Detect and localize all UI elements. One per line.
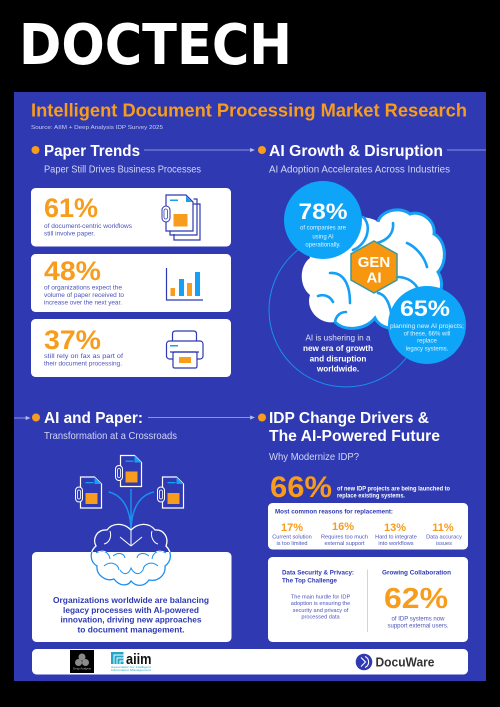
panel: reasons for replacement: 11%: [432, 522, 454, 534]
callout: 65% circle: legacy systems.: [406, 346, 449, 352]
callout: 78% circle: 78%: [298, 199, 348, 224]
panel: reasons for replacement: Most common reasons for replacement:: [275, 508, 393, 516]
panel: sponsor logos: [32, 649, 468, 674]
logo: DocuWare: DocuWare: [376, 655, 435, 669]
panel: reasons for replacement: Requires too much: [321, 534, 368, 540]
text block: new era of growth: worldwide.: [316, 364, 359, 374]
panel: security and collaboration: support external users.: [387, 624, 449, 630]
callout: 65% circle: replace: [417, 338, 437, 344]
main blue panel: [14, 92, 486, 681]
heading: Paper Trends: [32, 143, 201, 176]
heading: IDP Change Drivers: The AI-Powered Future: [269, 428, 440, 445]
panel: reasons for replacement: [268, 503, 468, 550]
panel: reasons for replacement: 13%: [384, 522, 406, 534]
panel: reasons for replacement: into workflows: [378, 541, 414, 547]
logo: Deep Analysis: Deep Analysis: [73, 666, 91, 670]
panel: balancing text card: innovation, driving new approaches: [60, 616, 202, 624]
panel: reasons for replacement: external support: [324, 541, 365, 547]
heading: Paper Trends: Paper Still Drives Business Processes: [44, 164, 201, 176]
panel: reasons for replacement: Current solution: [272, 534, 312, 540]
source line: Source: AIIM + Deep Analysis IDP Survey 2025: [31, 125, 163, 131]
big orbit ring: [269, 233, 423, 387]
heading: IDP Change Drivers: IDP Change Drivers &: [269, 410, 429, 427]
text block: new era of growth: AI is ushering in a: [305, 334, 371, 342]
panel: 48% stat card: volume of paper received to: [44, 292, 124, 299]
panel: security and collaboration: The main hurdle for IDP: [291, 594, 350, 600]
icon: Gen AI hexagon: GEN: [358, 254, 390, 271]
panel: reasons for replacement: issues: [436, 541, 452, 547]
panel: security and collaboration: 62%: [384, 583, 448, 615]
logo: AIIM: [111, 651, 152, 672]
heading: IDP Change Drivers: Why Modernize IDP?: [269, 451, 359, 463]
heading: AI and Paper: Transformation at a Crossroads: [44, 430, 177, 442]
panel: security and collaboration: Growing Collaboration: [382, 570, 451, 576]
heading: AI Growth and Disruption: AI Adoption Accelerates Across Industries: [269, 164, 450, 176]
icon: paper stack: [162, 195, 200, 240]
heading: Paper Trends: Paper Trends: [44, 143, 140, 160]
panel: balancing text card: to document management.: [78, 626, 184, 634]
logo: DocuWare: [356, 654, 435, 670]
heading: AI Growth and Disruption: [258, 143, 486, 176]
panel: security and collaboration: [268, 557, 468, 642]
heading: AI and Paper: [32, 410, 177, 442]
panel: 48% stat card: 48%: [44, 256, 101, 286]
panel: 61% stat card: 61%: [44, 193, 98, 223]
icon: brain outline: [91, 524, 170, 585]
panel: 37% stat card: still rely on fax as part of: [44, 353, 123, 360]
panel: security and collaboration: Data Security & Privacy:: [282, 570, 354, 576]
panel: 48% stat card: of organizations expect the: [44, 284, 122, 292]
panel: reasons for replacement: Data accuracy: [426, 534, 462, 540]
panel: reasons for replacement: is too limited: [276, 541, 308, 547]
panel: 48% stat card: increase over the next year.: [44, 300, 122, 306]
panel: balancing text card: [32, 552, 232, 642]
heading: IDP Change Drivers: [258, 410, 440, 463]
callout: 78% circle: of companies are: [300, 226, 347, 232]
logo: AIIM: Association for Intelligent: [111, 665, 151, 669]
panel: reasons for replacement: Hard to integrate: [375, 534, 417, 540]
arrows: documents into brain: [108, 489, 154, 532]
logo: Deep Analysis: [70, 650, 94, 673]
callout: 65% circle: planning new AI projects;: [390, 324, 464, 330]
stat: 66%: replace existing systems.: [337, 492, 405, 500]
text block: new era of growth: [303, 334, 373, 374]
callout: 78% circle: [284, 181, 362, 259]
stat: 66%: [270, 471, 450, 504]
callout: 65% circle: [388, 286, 466, 364]
heading: AI Growth and Disruption: AI Growth & Disruption: [269, 143, 443, 160]
title: Intelligent Document Processing Market Research: [31, 100, 467, 120]
heading: AI and Paper: AI and Paper:: [44, 410, 143, 427]
icon: Gen AI hexagon: [351, 241, 397, 293]
panel: 61% stat card: of document-centric workflows: [44, 223, 133, 230]
callout: 65% circle: 65%: [400, 296, 450, 321]
arrow: Paper Trends to AI Growth: [144, 148, 254, 152]
panel: security and collaboration: security and privacy of: [293, 608, 349, 614]
logo: AIIM: aiim: [126, 651, 152, 668]
panel: reasons for replacement: 17%: [281, 522, 303, 534]
panel: balancing text card: legacy processes with AI-powered: [63, 606, 199, 615]
brain illustration: [302, 210, 444, 329]
text block: new era of growth: new era of growth: [303, 344, 373, 353]
logo: DocTech: DOCTECH: [19, 13, 292, 78]
stat: 66%: of new IDP projects are being launched to: [337, 486, 450, 492]
callout: 65% circle: of these, 66% will: [404, 332, 450, 338]
panel: 37% stat card: 37%: [44, 325, 101, 355]
stat: 66%: 66%: [270, 471, 332, 504]
arrow: into AI and Paper: [14, 416, 30, 420]
panel: security and collaboration: The Top Challenge: [282, 578, 337, 584]
callout: 78% circle: operationally.: [305, 242, 341, 248]
panel: reasons for replacement: 16%: [332, 521, 354, 533]
panel: 37% stat card: [31, 319, 231, 377]
panel: security and collaboration: of IDP systems now: [392, 616, 445, 622]
callout: 78% circle: using AI: [312, 234, 334, 240]
icon: three documents: [76, 456, 184, 508]
icon: bar chart: [166, 268, 203, 300]
panel: 48% stat card: [31, 254, 231, 312]
panel: 37% stat card: their document processing.: [44, 360, 122, 368]
icon: printer: [166, 331, 203, 368]
panel: balancing text card: Organizations worldwide are balancing: [53, 596, 209, 605]
panel: 61% stat card: still involve paper.: [44, 230, 95, 238]
text block: new era of growth: and disruption: [310, 354, 366, 364]
logo: AIIM: Information Management: [111, 668, 151, 672]
arrow: AI and Paper to IDP: [148, 416, 254, 419]
panel: security and collaboration: adoption is ensuring the: [291, 601, 350, 607]
panel: 61% stat card: [31, 188, 231, 246]
panel: security and collaboration: processed data: [301, 614, 341, 620]
icon: Gen AI hexagon: AI: [366, 270, 382, 286]
